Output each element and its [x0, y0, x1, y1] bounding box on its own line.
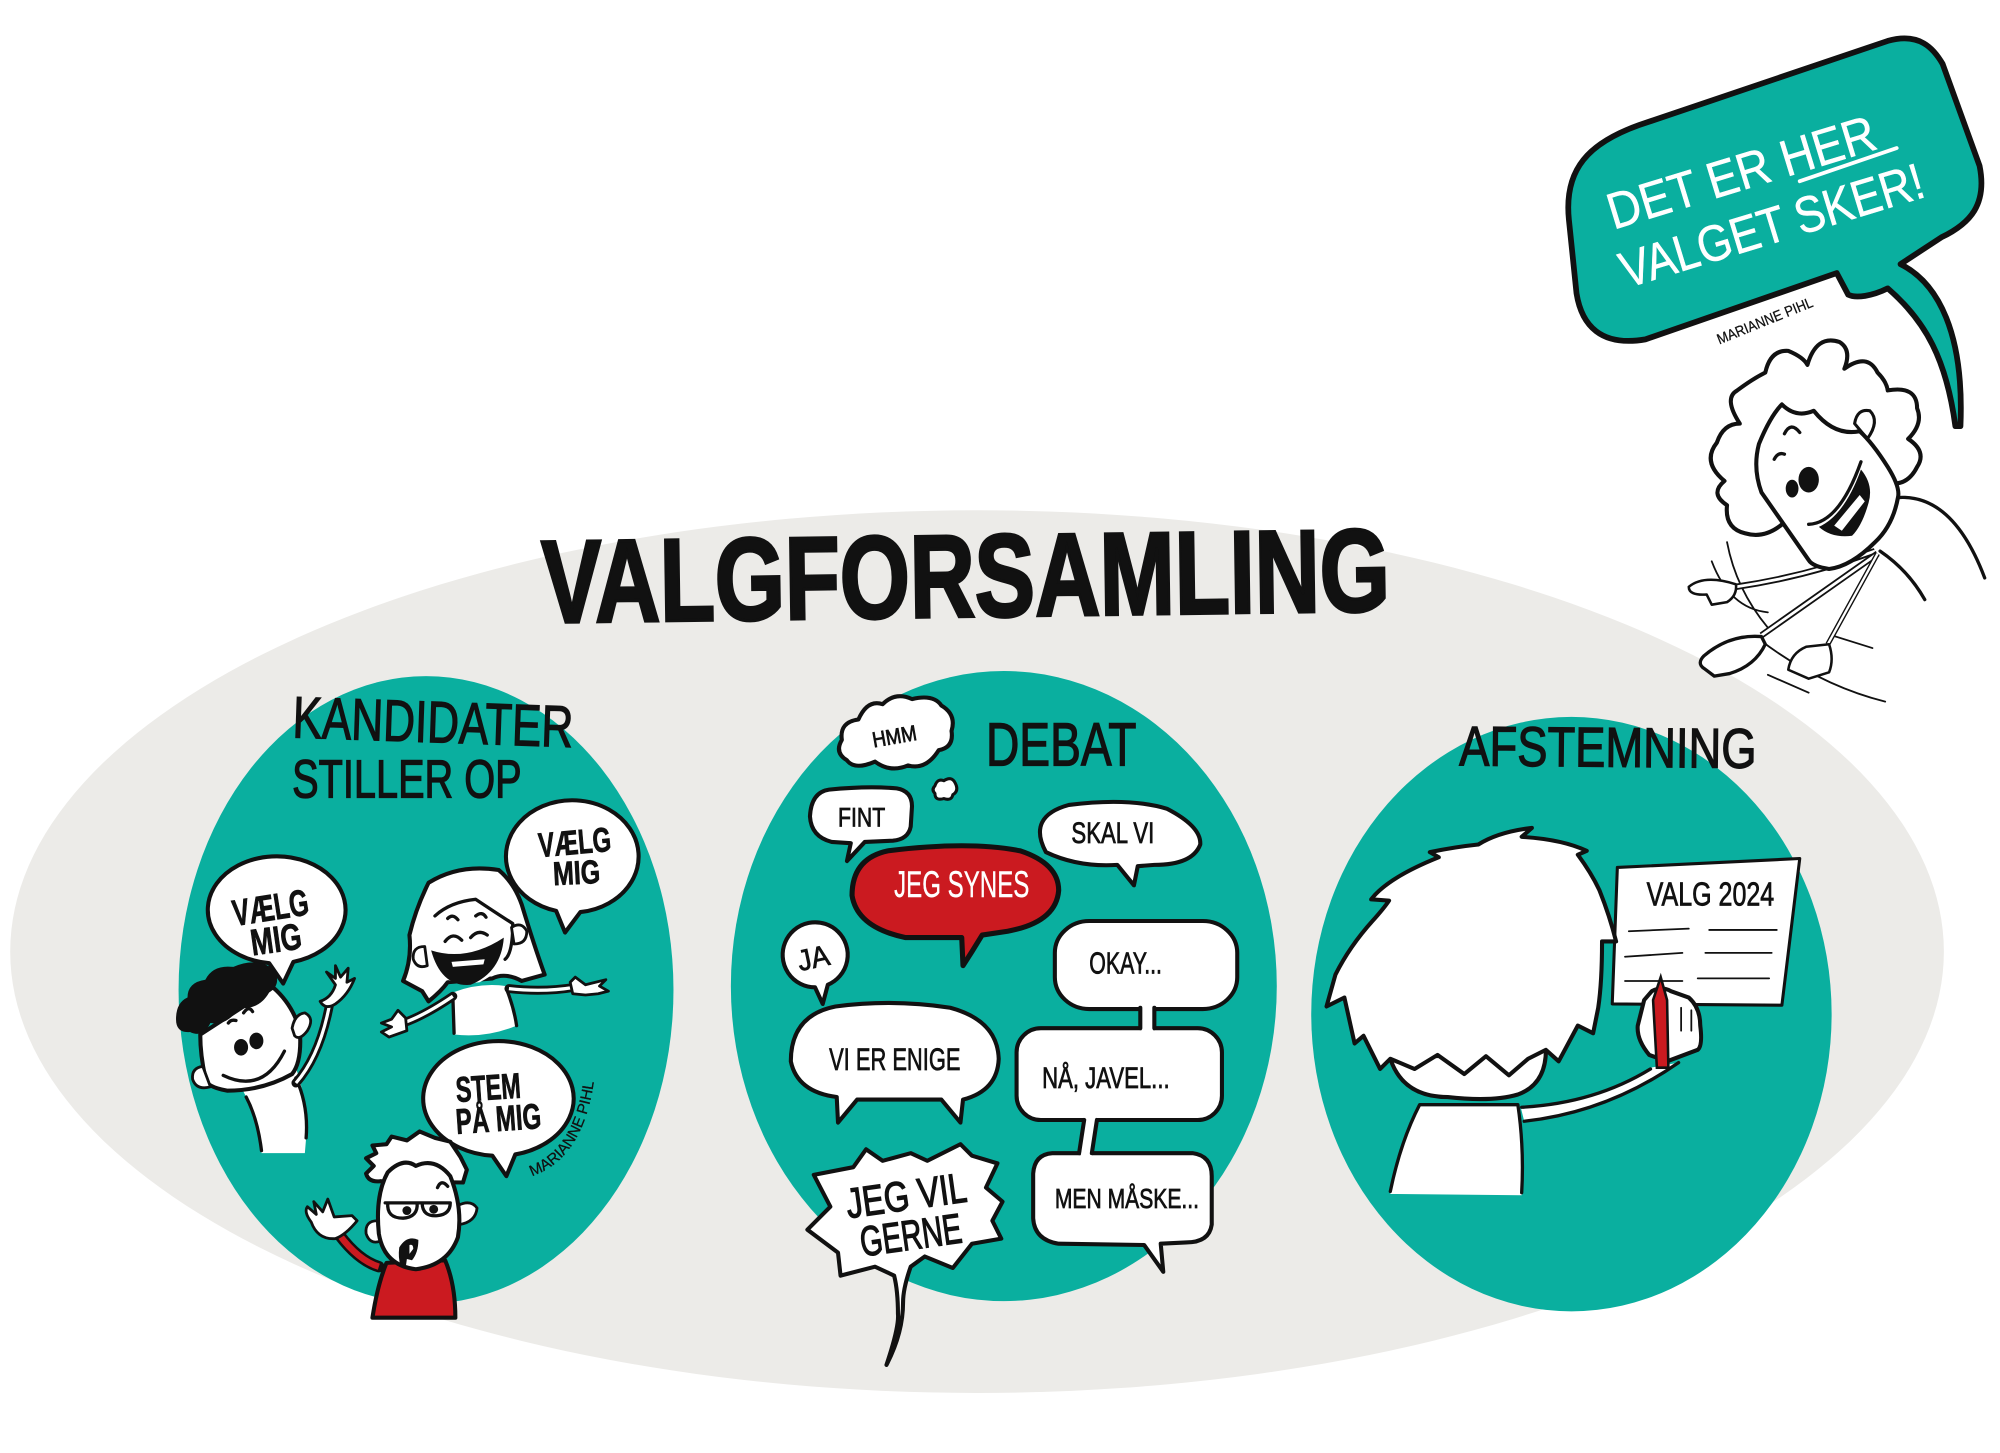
presenter: mouth — [1809, 462, 1861, 524]
speech bubble: vælg mig left: MIG — [248, 916, 304, 963]
teal circle: kandidater — [179, 676, 673, 1304]
speech bubble: skal vi — [1040, 802, 1200, 885]
callout text: det er her: DET ER HER — [1600, 104, 1883, 240]
connector: nå javel to men måske — [1079, 1115, 1097, 1158]
heading: kandidater: KANDIDATER — [292, 685, 574, 760]
voter: body and arm — [1390, 1063, 1679, 1195]
teal circle: debat — [731, 671, 1277, 1301]
speech bubble: jeg synes (red) — [852, 846, 1059, 966]
presenter: brows — [1774, 427, 1800, 459]
callout text: valget sker: VALGET SKER! — [1613, 152, 1931, 299]
thought cloud: hmm: HMM — [870, 720, 919, 752]
speech bubble: vælg mig right: MIG — [552, 854, 601, 893]
person: man with glasses — [306, 1131, 477, 1318]
speech bubble: vi er enige: VI ER ENIGE — [829, 1041, 960, 1077]
heading: afstemning: AFSTEMNING — [1459, 714, 1757, 780]
speech bubble: jeg synes (red): JEG SYNES — [894, 864, 1029, 905]
heading: debat: DEBAT — [986, 710, 1136, 778]
thought cloud: hmm — [839, 696, 953, 768]
speech bubble: vælg mig right — [506, 800, 639, 932]
panel: afstemning — [1327, 714, 1800, 1195]
person: laughing woman — [381, 868, 608, 1037]
speech bubble: jeg vil gerne burst: GERNE — [857, 1205, 965, 1265]
presenter: arms — [1736, 551, 1875, 587]
panel: kandidater stiller op — [176, 685, 641, 1320]
speech bubble: men måske: MEN MÅSKE... — [1055, 1183, 1199, 1214]
background ellipse — [10, 510, 1944, 1393]
speech bubble: fint — [810, 787, 912, 861]
speech bubble: skal vi: SKAL VI — [1071, 817, 1154, 850]
underline — [1800, 148, 1897, 181]
credit: marianne pihl top: MARIANNE PIHL — [1715, 295, 1815, 348]
presenter: upper pointing hand — [1689, 580, 1736, 605]
speech bubble: jeg vil gerne burst — [807, 1144, 1003, 1365]
speech bubble: vælg mig right: VÆLG — [537, 821, 613, 865]
title: VALGFORSAMLING — [541, 505, 1391, 648]
panel: debat — [783, 696, 1237, 1365]
heading: stiller op: STILLER OP — [292, 750, 522, 809]
character: presenter — [1689, 340, 1985, 702]
presenter: ear — [1855, 410, 1874, 439]
voter: hair — [1327, 828, 1616, 1075]
speech bubble: fint: FINT — [838, 803, 885, 833]
connector: okay to nå javel — [1140, 1003, 1154, 1033]
ballot paper — [1612, 859, 1800, 1005]
presenter: hair — [1711, 340, 1921, 535]
speech bubble: vælg mig left — [208, 856, 346, 984]
speech bubble: men måske — [1033, 1153, 1212, 1272]
speech bubble: ja — [783, 922, 848, 1004]
speech bubble: jeg vil gerne burst: JEG VIL — [843, 1164, 969, 1227]
speech bubble: okay — [1055, 921, 1237, 1009]
voter: chin — [1390, 1050, 1546, 1099]
speech bubble: vi er enige — [791, 1003, 999, 1123]
small thought cloud — [933, 779, 957, 799]
speech bubble: stem på mig: PÅ MIG — [454, 1096, 542, 1142]
presenter: shoulders — [1880, 497, 1985, 600]
presenter: face — [1756, 404, 1898, 569]
speech bubble: okay: OKAY... — [1089, 946, 1162, 980]
speech bubble: nå, javel: NÅ, JAVEL... — [1042, 1062, 1170, 1095]
presenter: lower pointing hand — [1700, 636, 1765, 676]
presenter: third hand — [1788, 644, 1832, 679]
credit: marianne pihl: MARIANNE PIHL — [528, 1082, 594, 1176]
speech bubble: stem på mig: STEM — [454, 1066, 522, 1110]
ballot paper: VALG 2024 — [1647, 877, 1774, 914]
speech bubble: stem på mig — [423, 1041, 574, 1176]
presenter: motion lines — [1712, 542, 1885, 702]
speech bubble: ja: JA — [795, 939, 833, 978]
presenter: eyes — [1798, 467, 1819, 492]
person: boy with black hair — [176, 962, 355, 1153]
speech bubble: nå, javel — [1017, 1028, 1222, 1120]
callout: teal speech bubble — [1568, 38, 1981, 426]
speech bubble: vælg mig left: VÆLG — [230, 882, 312, 934]
teal circle: afstemning — [1311, 717, 1832, 1311]
voter: hand and red pencil — [1638, 977, 1701, 1068]
